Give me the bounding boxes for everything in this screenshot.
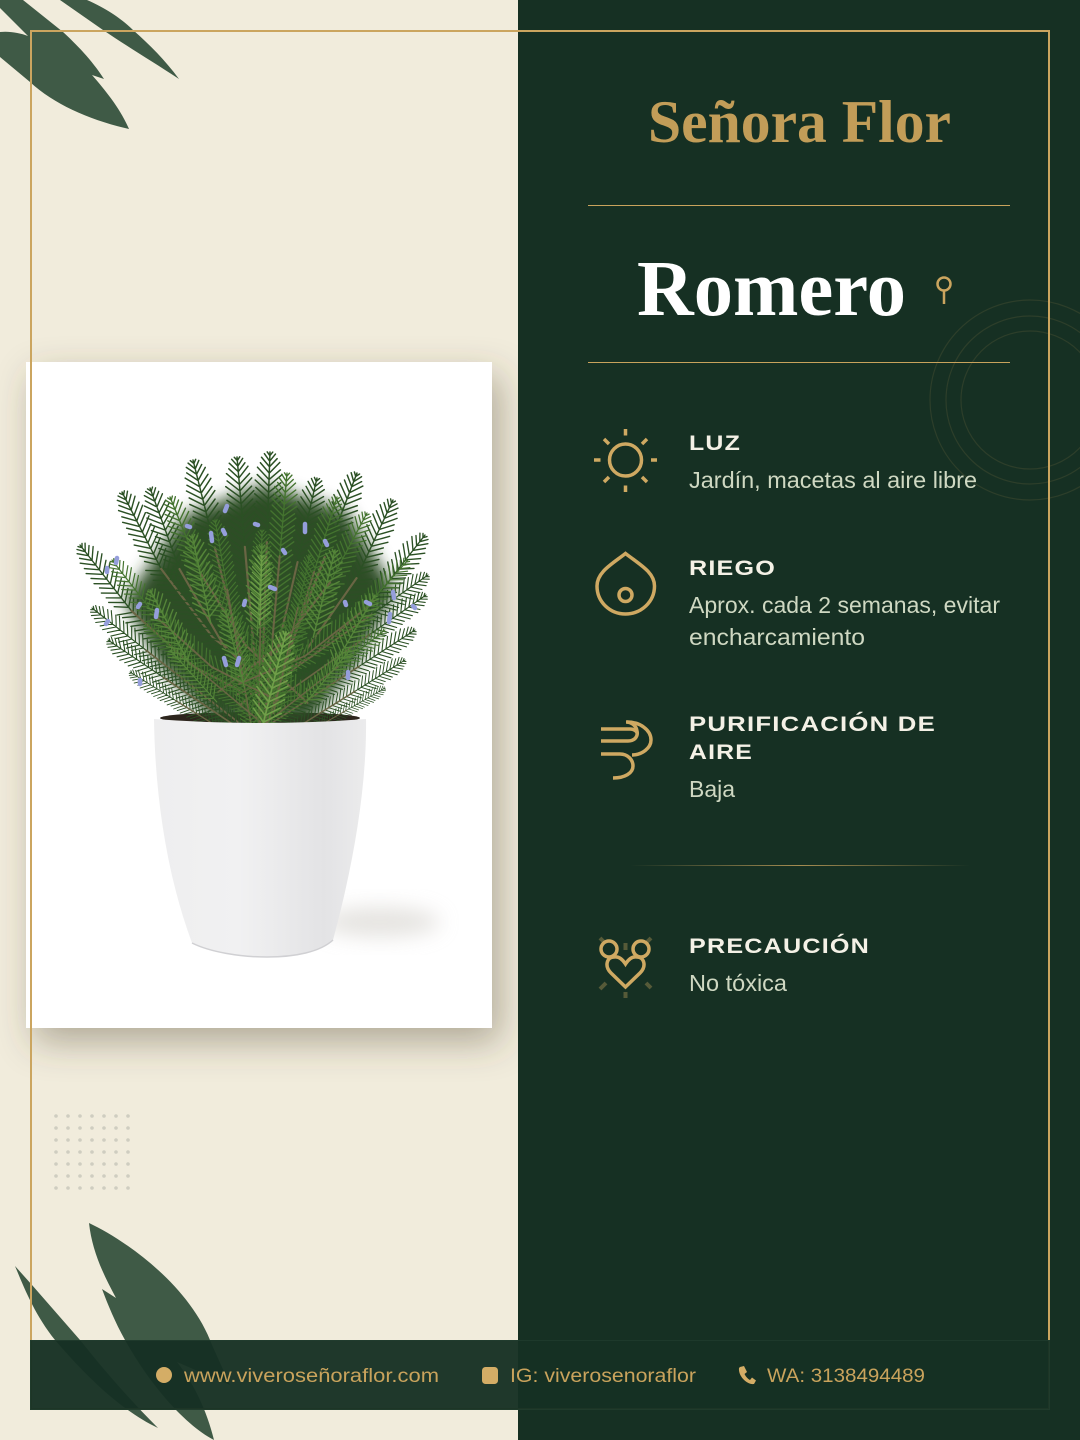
label: purificacion de aire: AIRE (689, 741, 753, 764)
pot shadow (320, 907, 440, 937)
icon: heart with circles (600, 938, 651, 998)
label: precaucion: PRECAUCIÓN (689, 934, 870, 958)
footer website: www.viveroseñoraflor.com (183, 1366, 439, 1387)
label: riego: RIEGO (689, 557, 776, 580)
icon: wind (601, 722, 651, 778)
plant foliage (68, 452, 437, 765)
section: luz (594, 429, 977, 493)
label: purificacion de aire: PURIFICACIÓN DE (689, 712, 936, 736)
text: luz value: Jardín, macetas al aire libre (689, 467, 977, 493)
footer instagram: IG: viverosenoraflor (510, 1366, 697, 1387)
label: luz: LUZ (689, 432, 741, 455)
text: purificacion value: Baja (689, 776, 735, 802)
brand title: Señora Flor (648, 89, 951, 155)
decorative concentric circles (930, 300, 1080, 500)
decorative dot grid (54, 1114, 130, 1190)
text: riego value (689, 592, 1000, 650)
section: precaucion (600, 934, 870, 998)
background: cream panel (0, 0, 518, 1440)
text: riego value: encharcamiento (689, 624, 865, 650)
icon: instagram square (482, 1367, 498, 1384)
icon: phone (739, 1366, 756, 1384)
plant name heading: Romero (637, 246, 906, 333)
plant flowers (106, 506, 415, 684)
footer bar (30, 1340, 1050, 1410)
label: purificacion de aire (689, 712, 936, 764)
plant pot (154, 719, 366, 957)
text: riego value: Aprox. cada 2 semanas, evitar (689, 592, 1000, 618)
section: riego (597, 554, 1000, 650)
text: precaucion value: No tóxica (689, 970, 787, 996)
footer whatsapp: WA: 3138494489 (767, 1366, 925, 1387)
icon: key symbol (938, 278, 950, 304)
icon: web dot (156, 1367, 172, 1383)
photo card: potted rosemary (26, 362, 492, 1028)
dark info panel (518, 0, 1080, 1440)
pot soil (160, 712, 360, 724)
section: purificacion de aire (601, 712, 936, 802)
decorative leaves: bottom left (15, 1223, 230, 1440)
decorative leaves: top left (0, 0, 179, 129)
icon: sun (594, 429, 657, 492)
icon: water drop (597, 554, 654, 614)
